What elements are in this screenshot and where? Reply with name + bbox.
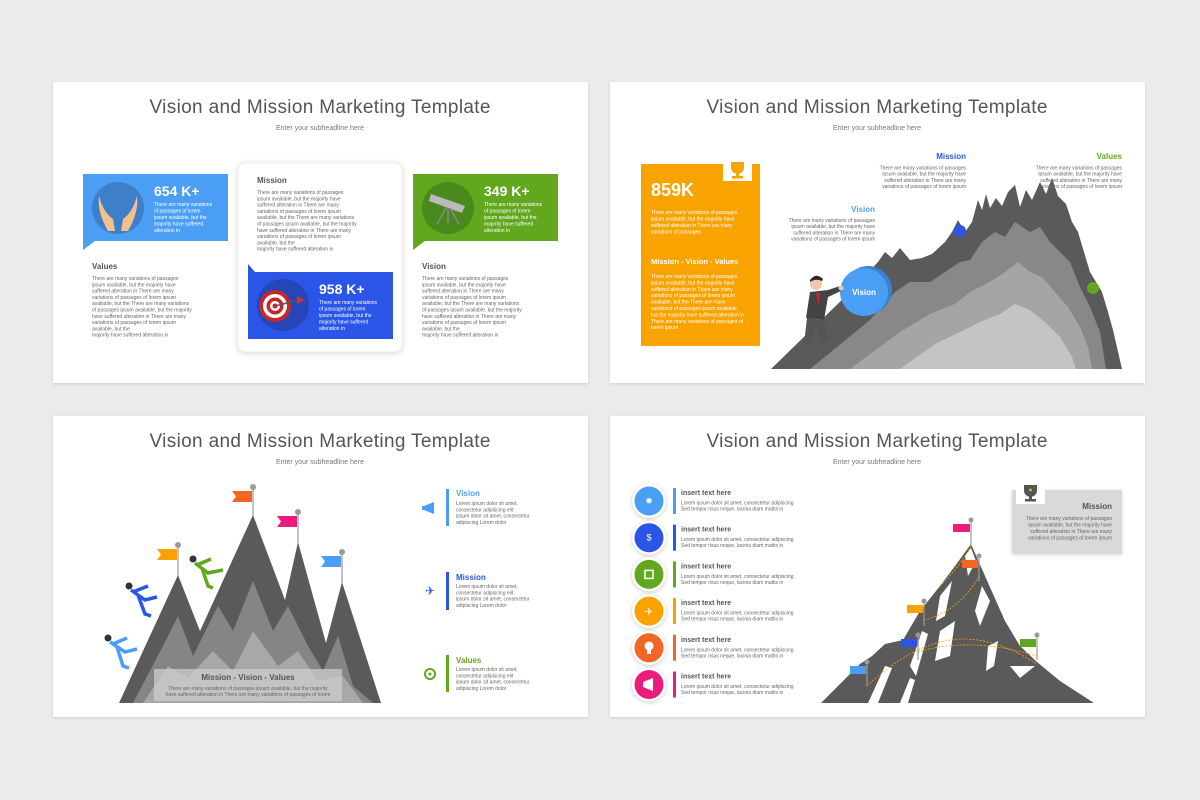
- list item: mission: [425, 572, 530, 610]
- icon: flags on mountain: [850, 518, 1040, 686]
- card: 349K green: majority have suffered: [484, 222, 533, 228]
- text block: vision label: ipsum available, but the majority have: [791, 224, 875, 230]
- icon: plane: ✈: [425, 584, 435, 598]
- text block: mission label: variations of passages of lorem ipsum: [882, 184, 966, 190]
- panel: orange stat box: lorem ipsum: [651, 325, 678, 331]
- panel: center mission card: have suffered alteration in There are many: [257, 228, 352, 234]
- text block: values: available, but the: [92, 326, 130, 332]
- text block: mission label: ipsum available, but the majority have: [882, 172, 966, 178]
- text block: values label: Values: [1097, 152, 1123, 161]
- text block: vision: suffered alteration in There are many: [422, 289, 504, 295]
- title: Vision and Mission Marketing Template: [706, 431, 1048, 452]
- title: Vision and Mission Marketing Template: [706, 97, 1048, 118]
- list item: mission: consectetur adipiscing elit: [456, 590, 514, 596]
- list item: values: ipsum dolor sit amet, consectetur: [456, 680, 530, 686]
- callout: mission vision values overlay: There are many variations of passages ipsum available, but the majority: [168, 686, 328, 692]
- card: 958K blue: majority have suffered: [319, 320, 368, 326]
- text block: vision label: variations of passages of lorem ipsum: [791, 237, 875, 243]
- list item: mission: Mission: [456, 573, 486, 582]
- card: 349K green: alteration in: [484, 228, 510, 234]
- list item: vision: Vision: [456, 489, 480, 498]
- card: 958K blue: 958 K+: [319, 281, 365, 297]
- card: 654K blue: of passages of lorem: [154, 208, 200, 214]
- text block: vision: Vision: [422, 262, 446, 271]
- step 5: [632, 631, 794, 665]
- list item: values: consectetur adipiscing elit: [456, 673, 514, 679]
- callout: mission box: suffered alteration in There are many: [1030, 529, 1112, 535]
- text block: vision: variations of passages of lorem ipsum: [422, 295, 506, 301]
- callout: mission box: [1012, 481, 1122, 554]
- icon: blue dot: [954, 225, 966, 237]
- list item: vision: adipiscing Lorem dolor: [456, 520, 507, 526]
- text block: values label: [1036, 152, 1123, 190]
- text block: values: available, but the There are many variations: [92, 301, 190, 307]
- panel: orange stat box: variations of passages: [651, 230, 701, 236]
- step 3: Lorem ipsum dolor sit amet, consectetur adipiscing: [681, 574, 794, 580]
- text block: vision label: suffered alteration in There are many: [793, 230, 875, 236]
- callout: mission vision values overlay: have suffered alteration in There are many variations of passages of lorem: [166, 692, 330, 698]
- panel: orange stat box: There are many variations of passages: [651, 274, 738, 280]
- icon: vision ball: Vision: [852, 288, 876, 297]
- panel: orange stat box: variations of passages of lorem ipsum: [651, 293, 735, 299]
- panel: orange stat box: suffered alteration in There are many: [651, 223, 733, 229]
- chart: mountain with path: [821, 544, 1094, 703]
- step 3: [632, 557, 794, 591]
- step 4: Sed tempor risus neque, lacinia diam mattis in: [681, 617, 783, 623]
- text block: values: have suffered alteration in There are many: [92, 314, 187, 320]
- step 6: Sed tempor risus neque, lacinia diam mattis in: [681, 690, 783, 696]
- chart: mountain range: [119, 515, 381, 703]
- panel: center mission card: [238, 163, 402, 352]
- panel: slide 2 mountain push: [610, 82, 1145, 383]
- card: 654K blue: There are many variations: [154, 202, 213, 208]
- card: 654K blue: [83, 174, 228, 250]
- text block: vision: have suffered alteration in There are many: [422, 314, 517, 320]
- panel: orange stat box: There are many variations of passages: [651, 210, 738, 216]
- step 1: Lorem ipsum dolor sit amet, consectetur adipiscing: [681, 500, 794, 506]
- card: 349K green: of passages of lorem: [484, 208, 530, 214]
- panel: orange stat box: suffered alteration in There are many: [651, 287, 733, 293]
- step 6: [632, 668, 794, 702]
- step 2: $: [646, 533, 652, 543]
- step 2: insert text here: [681, 527, 731, 534]
- list item: values: Lorem ipsum dolor sit amet,: [456, 667, 518, 673]
- card: 958K blue: [248, 264, 393, 339]
- icon: green dot: [1087, 282, 1099, 294]
- callout: mission box: Mission: [1082, 502, 1112, 511]
- text block: vision: [422, 262, 522, 339]
- step 4: ✈: [645, 607, 653, 618]
- panel: center mission card: variations of passages of lorem ipsum: [257, 209, 341, 215]
- step 6: insert text here: [681, 674, 731, 680]
- text block: values: of passages ipsum available, but the majority: [92, 308, 192, 314]
- panel: center mission card: There are many variations of passages: [257, 190, 344, 196]
- step 5: Lorem ipsum dolor sit amet, consectetur adipiscing: [681, 647, 794, 653]
- step 5: insert text here: [681, 637, 731, 644]
- card: 654K blue: alteration in: [154, 228, 180, 234]
- list item: vision: Lorem ipsum dolor sit amet,: [456, 501, 518, 507]
- text block: mission label: There are many variations of passages: [880, 166, 966, 172]
- step 6: Lorem ipsum dolor sit amet, consectetur adipiscing: [681, 684, 794, 690]
- text block: values: variations of passages of lorem ipsum: [92, 295, 176, 301]
- panel: orange stat box: variations of passages ipsum available,: [651, 306, 738, 312]
- text block: values: majority have suffered alteration in: [92, 333, 169, 339]
- panel: slide 1 values cards: [53, 82, 588, 383]
- panel: orange stat box: ipsum available, but the majority have: [651, 216, 735, 222]
- card: 958K blue: ipsum available, but the: [319, 313, 372, 319]
- text block: values label: variations of passages of lorem ipsum: [1038, 184, 1122, 190]
- callout: mission box: There are many variations of passages: [1026, 516, 1112, 522]
- panel: orange stat box: available, but the There are many: [651, 300, 726, 306]
- callout: mission vision values overlay: [154, 669, 342, 701]
- text block: values: There are many variations of passages: [92, 276, 179, 282]
- text block: values label: suffered alteration in There are many: [1040, 178, 1122, 184]
- text block: vision: majority have suffered alteration in: [422, 333, 499, 339]
- panel: center mission card: ipsum available, but the majority have: [257, 196, 341, 202]
- subtitle: Enter your subheadline here: [276, 459, 364, 466]
- subtitle: Enter your subheadline here: [833, 125, 921, 132]
- panel: center mission card: available, but the: [257, 240, 295, 246]
- text block: vision: ipsum available, but the majority have: [422, 282, 506, 288]
- icon: vision ball: [840, 266, 892, 316]
- card: 654K blue: 654 K+: [154, 183, 200, 199]
- text block: mission label: Mission: [936, 152, 966, 161]
- list item: values: Values: [456, 656, 482, 665]
- icon: flags: [157, 484, 345, 583]
- text block: values: [92, 262, 192, 339]
- step 4: insert text here: [681, 600, 731, 607]
- callout: mission box: ipsum available, but the majority have: [1028, 522, 1112, 528]
- text block: values: variations of passages of lorem ipsum: [92, 320, 176, 326]
- panel: center mission card: Mission: [257, 176, 287, 185]
- panel: orange stat box: 859K: [651, 180, 694, 200]
- list item: mission: Lorem ipsum dolor sit amet,: [456, 584, 518, 590]
- text block: values: Values: [92, 262, 118, 271]
- icon: trophy tab: [1016, 481, 1045, 504]
- panel: center mission card: variations of passages of lorem ipsum: [257, 234, 341, 240]
- icon: hands: [99, 196, 137, 231]
- card: 654K blue: ipsum available, but the: [154, 215, 207, 221]
- text block: vision label: [789, 205, 875, 243]
- text block: values: ipsum available, but the majority have: [92, 282, 176, 288]
- step 4: Lorem ipsum dolor sit amet, consectetur adipiscing: [681, 611, 794, 617]
- panel: center mission card: majority have suffered alteration in: [257, 247, 334, 253]
- subtitle: Enter your subheadline here: [276, 125, 364, 132]
- text block: vision: of passages ipsum available, but the majority: [422, 308, 522, 314]
- card: 654K blue: majority have suffered: [154, 222, 203, 228]
- panel: orange stat box: but the majority have suffered alteration in: [651, 312, 744, 318]
- icon: megaphone: [422, 502, 434, 514]
- list: six steps: [632, 484, 794, 702]
- list item: values: [425, 655, 530, 692]
- icon: trophy tab: [723, 158, 752, 181]
- text block: vision: available, but the There are many variations: [422, 301, 520, 307]
- callout: mission box: variations of passages of lorem ipsum: [1028, 536, 1112, 542]
- text block: values: suffered alteration in There are many: [92, 289, 174, 295]
- icon: gear: [425, 669, 435, 679]
- text block: vision label: Vision: [851, 205, 875, 214]
- list item: vision: [422, 489, 530, 526]
- panel: orange stat box: [641, 158, 760, 346]
- subtitle: Enter your subheadline here: [833, 459, 921, 466]
- step 3: insert text here: [681, 563, 731, 570]
- text block: vision: available, but the: [422, 326, 460, 332]
- panel: orange stat box: ipsum available, but the majority have: [651, 280, 735, 286]
- chart: layered mountain: [771, 178, 1122, 369]
- icon: businessman: [804, 276, 844, 344]
- step 4: [632, 594, 794, 628]
- text block: mission label: [880, 152, 966, 190]
- list item: mission: ipsum dolor sit amet, consectetur: [456, 597, 530, 603]
- list item: vision: ipsum dolor sit amet, consectetur: [456, 514, 530, 520]
- card: 958K blue: of passages of lorem: [319, 306, 365, 312]
- card: 349K green: 349 K+: [484, 183, 530, 199]
- panel: slide 3 peaks with flags: [53, 416, 588, 717]
- callout: mission vision values overlay: Mission - Vision - Values: [201, 673, 295, 682]
- panel: orange stat box: There are many variations of passages of: [651, 319, 744, 325]
- panel: orange stat box: Mission - Vision - Values: [651, 257, 738, 266]
- icon: climbers: [104, 556, 223, 668]
- step 3: Sed tempor risus neque, lacinia diam mattis in: [681, 580, 783, 586]
- card: 958K blue: alteration in: [319, 326, 345, 332]
- text block: values label: There are many variations of passages: [1036, 166, 1122, 172]
- panel: slide 4 six steps: [610, 416, 1145, 717]
- card: 349K green: ipsum available, but the: [484, 215, 537, 221]
- step 1: Sed tempor risus neque, lacinia diam mattis in: [681, 506, 783, 512]
- card: 349K green: [413, 174, 558, 250]
- list item: vision: consectetur adipiscing elit: [456, 507, 514, 513]
- text block: vision label: There are many variations of passages: [789, 218, 875, 224]
- step 5: Sed tempor risus neque, lacinia diam mattis in: [681, 653, 783, 659]
- step 1: ✹: [645, 496, 653, 506]
- step 2: [632, 521, 794, 555]
- step 1: insert text here: [681, 490, 731, 497]
- step 2: Sed tempor risus neque, lacinia diam mattis in: [681, 543, 783, 549]
- step 2: Lorem ipsum dolor sit amet, consectetur adipiscing: [681, 537, 794, 543]
- card: 958K blue: There are many variations: [319, 300, 378, 306]
- title: Vision and Mission Marketing Template: [150, 97, 490, 118]
- panel: center mission card: of passages ipsum available, but the majority: [257, 222, 357, 228]
- card: 349K green: There are many variations: [484, 202, 543, 208]
- title: Vision and Mission Marketing Template: [150, 431, 490, 452]
- text block: vision: variations of passages of lorem ipsum: [422, 320, 506, 326]
- panel: center mission card: available, but the There are many variations: [257, 215, 355, 221]
- panel: center mission card: suffered alteration in There are many: [257, 203, 339, 209]
- text block: vision: There are many variations of passages: [422, 276, 509, 282]
- text block: mission label: suffered alteration in There are many: [884, 178, 966, 184]
- text block: values label: ipsum available, but the majority have: [1038, 172, 1122, 178]
- icon: target: [259, 290, 291, 322]
- icon: telescope: [429, 194, 465, 225]
- list item: values: adipiscing Lorem dolor: [456, 686, 507, 692]
- list item: mission: adipiscing Lorem dolor: [456, 603, 507, 609]
- step 1: [632, 484, 794, 518]
